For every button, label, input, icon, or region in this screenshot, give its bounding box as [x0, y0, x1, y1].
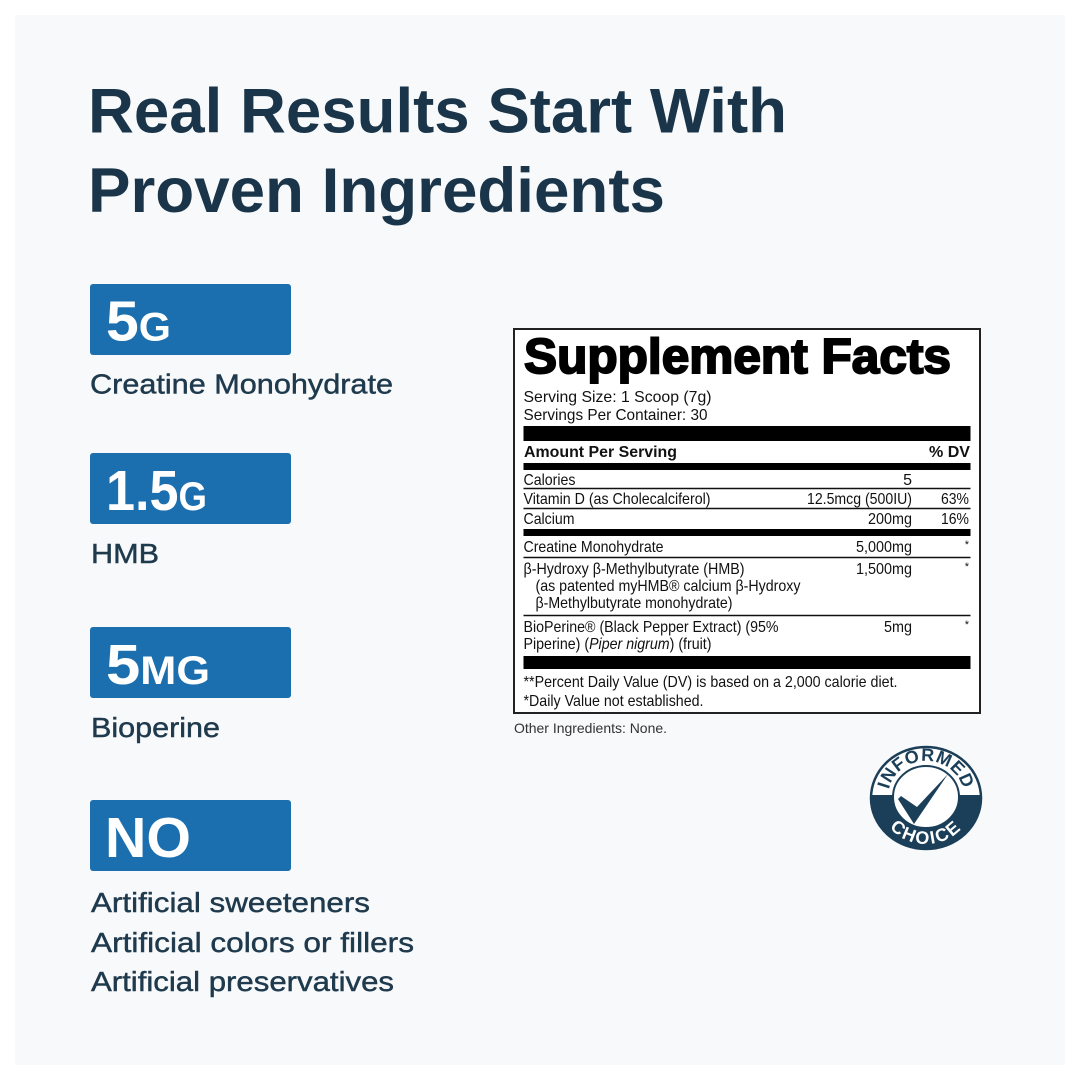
nutrient rows: 5 — [903, 472, 912, 489]
footnotes: **Percent Daily Value (DV) is based on a 2,000 calorie diet. — [524, 674, 898, 691]
ingredient rows: (as patented myHMB® calcium β-Hydroxy — [536, 578, 800, 595]
ingredient rows: 5mg — [884, 619, 912, 636]
ingredient rows: β-Hydroxy β-Methylbutyrate (HMB) — [524, 561, 744, 578]
ingredient rows: * — [965, 619, 970, 631]
serving info — [524, 389, 712, 424]
footnotes: *Daily Value not established. — [524, 693, 704, 710]
serving info: Serving Size: 1 Scoop (7g) — [524, 389, 712, 406]
nutrient rows: Calories — [524, 472, 576, 489]
nutrient rows: Vitamin D (as Cholecalciferol) — [524, 491, 710, 508]
title: Proven Ingredients — [88, 156, 665, 226]
item: bioperine — [90, 627, 291, 743]
column headers: Amount Per Serving — [524, 444, 677, 461]
icon: informed choice badge: CHOICE — [892, 820, 961, 844]
nutrient rows: 200mg — [868, 511, 912, 528]
panel: supplement facts label — [514, 329, 980, 713]
item: creatine: 5G — [106, 290, 171, 354]
ingredient rows: * — [965, 561, 970, 573]
title — [88, 76, 787, 226]
item: no artificial: Artificial preservatives — [91, 966, 394, 997]
nutrient rows: 16% — [941, 511, 969, 528]
ingredient rows: 5,000mg — [856, 539, 912, 556]
item: no artificial: Artificial sweeteners — [91, 887, 370, 918]
panel: dosage list — [90, 284, 414, 997]
item: bioperine: 5MG — [106, 633, 210, 697]
heading: supplement facts: Supplement Facts — [524, 330, 951, 384]
nutrient rows: Calcium — [524, 511, 574, 528]
ingredient rows: BioPerine® (Black Pepper Extract) (95% — [524, 619, 778, 636]
ingredient rows: Creatine Monohydrate — [524, 539, 664, 556]
item: HMB — [90, 453, 291, 569]
ingredient rows: Piperine) (Piper nigrum) (fruit) — [524, 636, 712, 653]
ingredient rows: * — [965, 539, 970, 551]
item: bioperine: Bioperine — [91, 712, 220, 743]
item: creatine — [90, 284, 393, 400]
ingredient rows: β-Methylbutyrate monohydrate) — [536, 595, 732, 612]
icon: informed choice badge: INFORMED — [877, 748, 973, 788]
title: Real Results Start With — [88, 76, 787, 146]
nutrient rows: 12.5mcg (500IU) — [807, 491, 912, 508]
other ingredients note: Other Ingredients: None. — [514, 720, 667, 736]
item: no artificial: Artificial colors or fillers — [91, 927, 414, 958]
icon: informed choice badge — [870, 746, 982, 850]
ingredient rows — [524, 539, 970, 653]
column headers — [524, 444, 970, 461]
nutrient rows: 63% — [941, 491, 969, 508]
item: no artificial: NO — [105, 806, 191, 870]
footnotes — [524, 674, 898, 710]
item: HMB: HMB — [91, 538, 159, 569]
item: creatine: Creatine Monohydrate — [90, 368, 393, 400]
nutrient rows — [524, 472, 970, 528]
item: HMB: 1.5G — [106, 459, 207, 523]
serving info: Servings Per Container: 30 — [524, 407, 708, 424]
column headers: % DV — [929, 444, 970, 461]
ingredient rows: 1,500mg — [856, 561, 912, 578]
item: no artificial — [90, 800, 414, 997]
